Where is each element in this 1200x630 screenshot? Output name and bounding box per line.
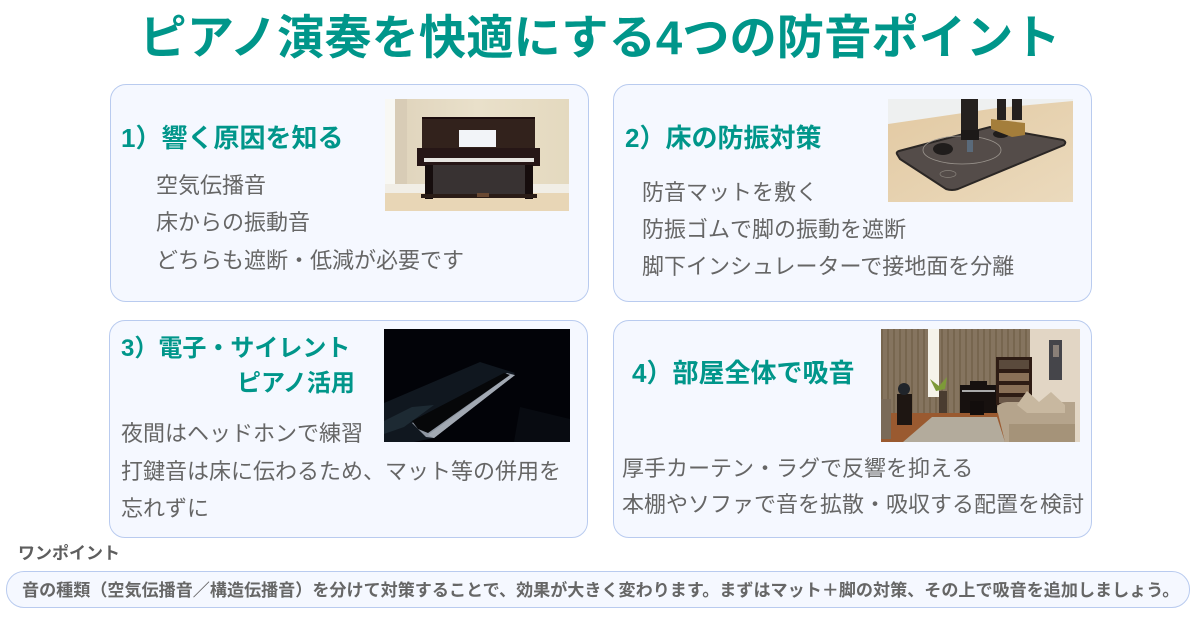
- text: 4 bookshelf: 本棚やソファで音を拡散・吸収する配置を検討: [622, 492, 1084, 517]
- text: 1 both need reduction: どちらも遮断・低減が必要です: [156, 248, 464, 273]
- heading: 1: 1）響く原因を知る: [121, 123, 343, 153]
- panel: 2 floor vibration: [613, 84, 1092, 302]
- image: digital piano in dark: [384, 329, 570, 442]
- callout: one point tip: [6, 571, 1190, 608]
- text: 3 key noise: 打鍵音は床に伝わるため、マット等の併用を: [121, 459, 561, 484]
- text: 1 floor vibration: 床からの振動音: [156, 210, 310, 235]
- text: 3 headphones: 夜間はヘッドホンで練習: [121, 421, 363, 446]
- text: 1 airborne sound: 空気伝播音: [156, 173, 266, 198]
- heading: 3 line 1: 3）電子・サイレント: [121, 335, 350, 362]
- text: 3 reminder: 忘れずに: [121, 496, 209, 521]
- image: furnished room: [881, 329, 1080, 442]
- image: upright piano: [385, 99, 569, 211]
- panel: 1 causes of sound: [110, 84, 589, 302]
- panel: 4 room absorption: [613, 320, 1092, 538]
- text: 2 rubber: 防振ゴムで脚の振動を遮断: [642, 217, 906, 242]
- heading: 4: 4）部屋全体で吸音: [632, 358, 854, 388]
- image: anti-vibration mat: [888, 99, 1073, 202]
- heading: 2: 2）床の防振対策: [625, 123, 821, 153]
- label: one point: ワンポイント: [18, 544, 120, 563]
- text: 2 mat: 防音マットを敷く: [642, 180, 818, 205]
- text: 4 curtains: 厚手カーテン・ラグで反響を抑える: [622, 456, 973, 481]
- text: 2 insulator: 脚下インシュレーターで接地面を分離: [642, 254, 1014, 279]
- callout text: 音の種類（空気伝播音／構造伝播音）を分けて対策することで、効果が大きく変わります。まずはマット＋脚の対策、その上で吸音を追加しましょう。: [22, 581, 1179, 600]
- title: ピアノ演奏を快適にする4つの防音ポイント: [139, 12, 1061, 65]
- heading: 3 line 2: ピアノ活用: [237, 370, 355, 397]
- panel: 3 digital and silent piano: [109, 320, 588, 538]
